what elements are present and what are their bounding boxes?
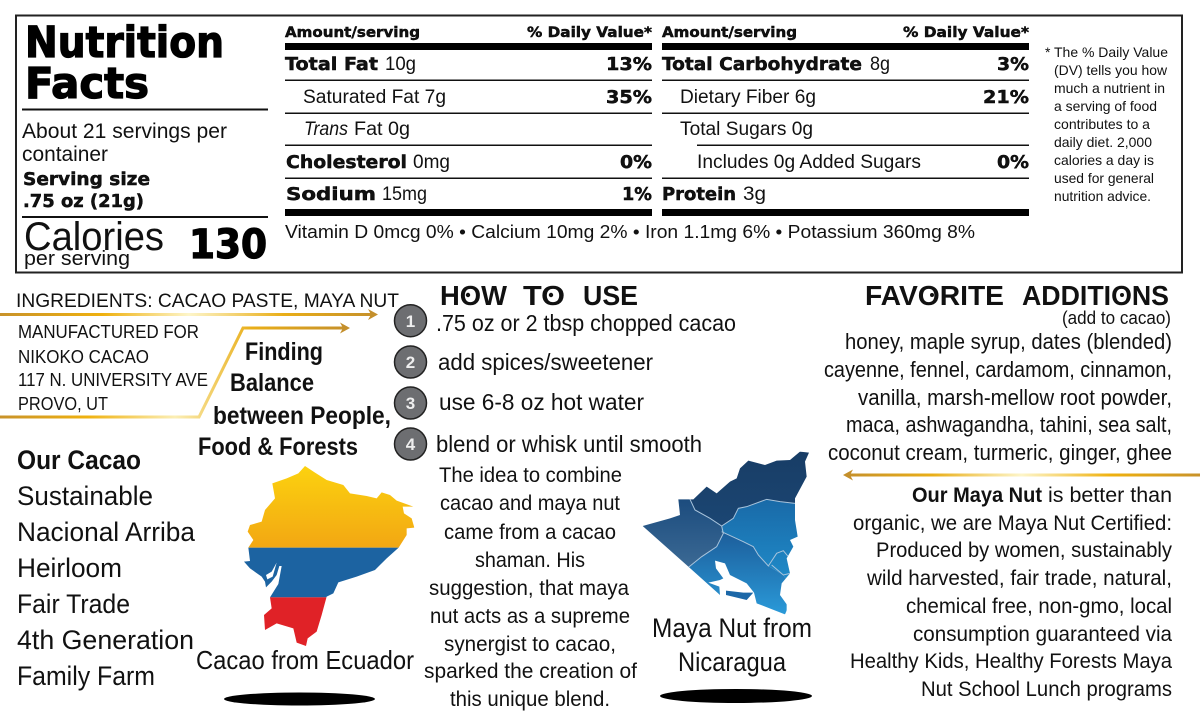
table: left column: Total Fat [285,55,378,75]
heading: finding balance [198,338,391,461]
text: our maya nut: Healthy Kids, Healthy Forests Maya [850,649,1172,673]
step 3: 3 [406,394,415,413]
text: additions list: coconut cream, turmeric, ginger, ghee [828,440,1172,465]
text: manufacturer: NIKOKO CACAO [18,346,149,367]
label: maya nut from nicaragua: Nicaragua [678,647,787,677]
step 1: 1 [406,312,415,331]
panel: nutrition facts [16,16,1182,272]
table: left column: Cholesterol [286,153,407,173]
table: left column: Fat 0g [354,119,410,140]
text: footnote: nutrition advice. [1054,188,1151,204]
text: servings: .75 oz (21g) [23,192,144,212]
table: left column: 35% [606,88,652,108]
heading: favorite additions [865,280,1169,311]
text: blend story: The idea to combine [439,463,622,487]
step 4: 4 [406,435,416,454]
title: Nutrition Facts: Nutrition [25,18,224,68]
text: footnote [1045,44,1168,204]
heading: favorite additions: ADDITIONS [1022,280,1169,311]
text: footnote: a serving of food [1054,98,1157,114]
text: our cacao: Our Cacao [17,445,141,475]
table: left column: Trans [304,119,348,140]
table: right column: Dietary Fiber 6g [680,87,816,108]
text: additions list: honey, maple syrup, dates (blended) [845,329,1172,354]
text: our cacao: Nacional Arriba [17,517,196,547]
table: right column: 21% [983,88,1029,108]
text: manufacturer: PROVO, UT [18,393,108,414]
text: footnote: * [1045,44,1051,60]
text: our maya nut: consumption guaranteed via [913,622,1172,646]
text: our cacao: Fair Trade [17,589,130,619]
title: Nutrition Facts [25,18,224,109]
text: our maya nut: is better than [1048,483,1172,507]
text: our cacao: Heirloom [17,553,122,583]
table: left column: Amount/serving [285,25,420,41]
text: our maya nut: wild harvested, fair trade, natural, [866,566,1172,590]
text: our cacao [17,445,196,691]
table: right column: 0% [997,153,1029,173]
text: footnote: much a nutrient in [1054,80,1165,96]
text: servings: Serving size [23,170,150,190]
text: additions list: vanilla, marsh-mellow root powder, [858,385,1172,410]
calories [24,215,267,270]
step 2 [394,346,653,378]
table: right column: Amount/serving [662,25,797,41]
heading: finding balance: Food & Forests [198,433,358,461]
text: blend story: suggestion, that maya [429,576,629,600]
table: left column: Saturated Fat 7g [303,87,446,108]
step 2: 2 [406,353,415,372]
table: left column: 15mg [382,184,427,205]
label: cacao from ecuador: Cacao from Ecuador [196,645,414,675]
shadow: nicaragua [660,689,812,703]
arrow: maya nut [843,470,1200,480]
text: footnote: daily diet. 2,000 [1054,134,1152,150]
calories: 130 [189,222,267,268]
table: right column [662,25,1030,216]
heading: finding balance: Balance [230,369,314,397]
table: left column: 0% [620,153,652,173]
text: manufacturer: MANUFACTURED FOR [18,321,199,342]
text: servings [22,120,227,212]
text: footnote: used for general [1054,170,1154,186]
text: blend story: synergist to cacao, [444,632,616,656]
table: right column: Includes 0g Added Sugars [697,152,921,173]
table: right column: 8g [870,54,890,75]
text: our maya nut: Nut School Lunch programs [921,677,1172,701]
text: blend story: sparked the creation of [424,659,637,683]
text: our maya nut [850,483,1172,701]
heading: finding balance: between People, [213,402,391,430]
text: our maya nut: Produced by women, sustainably [876,538,1172,562]
step 4 [394,428,702,460]
step 3 [394,387,644,419]
table: right column: % Daily Value* [903,25,1030,41]
text: footnote: The % Daily Value [1054,44,1168,60]
text: blend story: cacao and maya nut [440,491,620,515]
text: blend story [424,463,637,711]
step 1: .75 oz or 2 tbsp chopped cacao [436,310,736,336]
text: footnote: calories a day is [1054,152,1154,168]
title: Nutrition Facts: Facts [25,59,149,109]
heading: how to use: TO [523,280,565,311]
table: left column: 0mg [413,152,450,173]
table: left column: 1% [622,185,652,205]
text: blend story: shaman. His [475,548,585,572]
text: our maya nut: Our Maya Nut [912,483,1042,507]
step 4: blend or whisk until smooth [436,431,702,457]
table: left column [285,25,653,216]
heading: how to use [440,280,638,311]
table: left column: % Daily Value* [527,25,653,41]
text: blend story: this unique blend. [450,687,610,711]
text: footnote: (DV) tells you how [1054,62,1168,78]
text: vitamins: Vitamin D 0mcg 0% • Calcium 10mg 2% • Iron 1.1mg 6% • Potassium 360mg 8% [285,221,975,242]
table: right column: 3% [997,55,1029,75]
text: servings: container [22,143,108,166]
text: our maya nut: organic, we are Maya Nut Certified: [853,511,1172,535]
map: Ecuador [244,466,414,646]
text: footnote: contributes to a [1054,116,1150,132]
heading: how to use: USE [583,280,638,311]
text: our cacao: Family Farm [17,661,155,691]
label: maya nut from nicaragua [652,613,812,677]
text: manufacturer: 117 N. UNIVERSITY AVE [18,369,208,390]
text: manufacturer [18,321,208,414]
text: additions list: maca, ashwagandha, tahini, sea salt, [846,412,1172,437]
heading: how to use: HOW [440,280,508,311]
table: left column: Sodium [286,185,376,205]
table: left column: 13% [606,55,652,75]
text: blend story: came from a cacao [444,520,616,544]
calories: Calories [24,215,164,259]
calories: per serving [24,248,130,270]
table: right column: Total Carbohydrate [662,55,862,75]
text: servings: About 21 servings per [22,120,227,143]
step 3: use 6-8 oz hot water [439,389,644,415]
map: Nicaragua [642,452,809,614]
text: additions list [824,329,1172,465]
text: our maya nut: chemical free, non-gmo, local [906,594,1172,618]
heading: finding balance: Finding [245,338,323,366]
text: our cacao: 4th Generation [17,625,194,655]
arrow: ingredients [0,309,378,320]
table: right column: Total Sugars 0g [680,119,813,140]
text: additions list: cayenne, fennel, cardamom, cinnamon, [824,357,1172,382]
table: right column: Protein [662,185,736,205]
text: ingredients: INGREDIENTS: CACAO PASTE, MAYA NUT [16,290,399,312]
text: our cacao: Sustainable [17,481,153,511]
heading: favorite additions: FAVORITE [865,280,1004,311]
label: maya nut from nicaragua: Maya Nut from [652,613,812,643]
step 2: add spices/sweetener [438,349,653,375]
table: right column: 3g [743,184,766,205]
arrow: manufacturer [0,322,350,417]
text: blend story: nut acts as a supreme [430,604,630,628]
step 1 [394,305,736,337]
text: add to cacao: (add to cacao) [1062,308,1171,328]
shadow: ecuador [224,692,375,706]
table: left column: 10g [385,54,416,75]
